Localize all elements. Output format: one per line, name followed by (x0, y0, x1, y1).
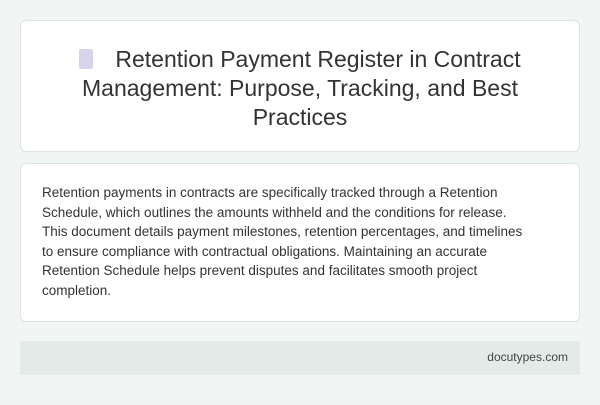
icon: receipt (79, 49, 93, 69)
panel: title (20, 20, 580, 152)
title: Retention Payment Register in Contract Management: Purpose, Tracking, and Best Practices (82, 46, 521, 130)
footer text: docutypes.com (487, 350, 568, 364)
text block: Retention payments in contracts are specifically tracked through a Retention Schedule, which outlines the amounts withheld and the conditions for release. This document details payment milestones, retention percentages, and timelines to ensure compliance with contractual obligations. Maintaining an accurate Retention Schedule helps prevent disputes and facilitates smooth project completion. (42, 185, 522, 298)
panel: description (20, 163, 580, 322)
footer (20, 341, 580, 375)
